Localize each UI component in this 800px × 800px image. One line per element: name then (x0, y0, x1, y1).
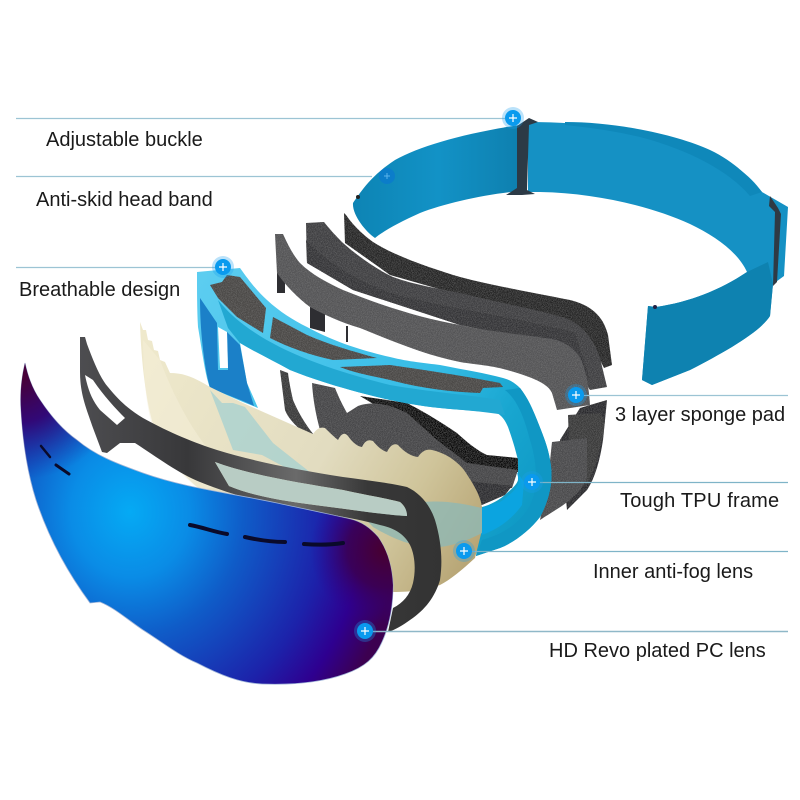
lens: maroon right tint (318, 513, 393, 622)
adjustable buckle, top (506, 118, 538, 195)
TPU frame: lower band shade (218, 300, 505, 415)
sponge: lower band (312, 383, 518, 490)
callout: HD Revo plated PC lens: HD Revo plated PC lens (549, 640, 766, 662)
lens: second layer sheen (143, 340, 240, 490)
inner anti-fog lens (140, 322, 482, 592)
exploded view infographic (16, 107, 788, 685)
TPU frame: sponge inserts (210, 275, 503, 393)
sponge: middle layer (306, 222, 607, 485)
lens body (140, 322, 482, 592)
sponge: front layer (275, 234, 590, 520)
callout: Anti-skid head band (16, 168, 395, 211)
callout: Breathable design (16, 256, 234, 301)
callout: Inner anti-fog lens: Inner anti-fog lens (593, 561, 753, 583)
black frame (80, 337, 441, 632)
TPU frame (197, 268, 552, 556)
lens: maroon upper-left tint (20, 363, 88, 476)
sponge: small posts (277, 272, 348, 342)
callout: HD Revo plated PC lens (354, 620, 788, 662)
headband strap (353, 118, 788, 385)
lens: vent slots (41, 446, 343, 545)
strap: inner shading (642, 262, 773, 385)
sponge: lower left arms (280, 370, 314, 435)
TPU frame: saturated blue inner corner (482, 472, 524, 535)
strap: right section (528, 122, 788, 385)
HD Revo plated lens (15, 355, 400, 684)
callout: Tough TPU frame: Tough TPU frame (620, 490, 779, 512)
TPU frame body (197, 268, 552, 556)
strap: left section (353, 125, 523, 238)
callout: Adjustable buckle (16, 107, 524, 151)
sponge pad layers (275, 213, 612, 520)
callout: Tough TPU frame (521, 471, 788, 512)
lens: tinted band (TPU seen through) (352, 501, 482, 547)
callout: 3 layer sponge pad (565, 384, 788, 426)
frame: tinted window (215, 462, 407, 516)
strap: top edge fold (565, 122, 762, 196)
callout: Adjustable buckle: Adjustable buckle (46, 129, 203, 151)
sponge: lower right end piece (540, 438, 587, 520)
callout: Inner anti-fog lens (453, 540, 788, 583)
callout: Breathable design: Breathable design (19, 279, 180, 301)
TPU frame: darker right side (476, 388, 552, 556)
lens body with blue gradient (21, 363, 393, 684)
TPU frame: inner blue arm (200, 298, 254, 406)
callout: Anti-skid head band: Anti-skid head band (36, 189, 213, 211)
sponge: back layer, dark (344, 213, 612, 510)
TPU frame: vent window (218, 327, 228, 368)
side buckle, right (769, 196, 781, 286)
callout: 3 layer sponge pad: 3 layer sponge pad (615, 404, 785, 426)
lens: pale aqua arms (TPU seen through) (210, 390, 320, 480)
